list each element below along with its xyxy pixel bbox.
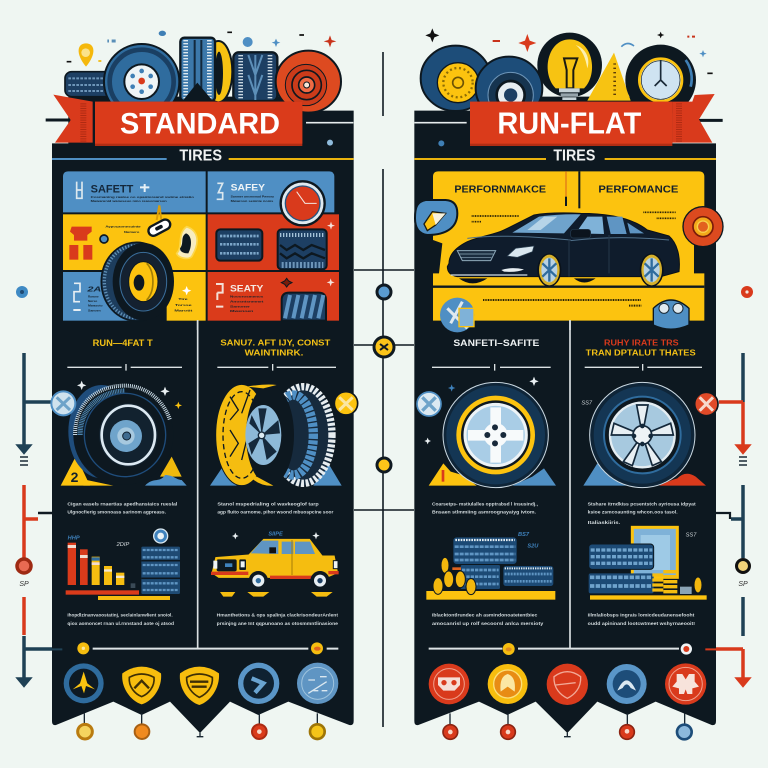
text block: standard left 2: Ihopdlzinanvaoostatinj, seclainlanwlient snoiol. [67, 612, 173, 617]
badge: red gear [665, 663, 706, 705]
tire illustration: black [61, 381, 187, 486]
heading: performance right: PERFOMANCE [598, 185, 678, 196]
subheading: tires: TIRES [553, 148, 595, 165]
cell: blue lower left: Mwasoto [88, 304, 103, 308]
illustration: tire stacks and coins: S2U [527, 543, 539, 549]
cell: safety blue 2: Sanmer ansmonad Pwroey [231, 194, 274, 198]
column heading: trade: RUHY IRATE TRS [604, 338, 679, 347]
center connector lines [354, 52, 414, 727]
cell: yellow left: Aypocaonesuinte [105, 225, 141, 229]
badge: navy arrows [64, 663, 104, 703]
cell: blue lower left: Nerso [88, 299, 98, 303]
illustration: tire stacks and coins: BS7 [518, 532, 530, 538]
cell: blue lower left [63, 272, 130, 321]
icon: left badge [417, 392, 441, 416]
text block: run-flat right 1: ksioe zsmcoaunting whcon.oos tasol. [588, 510, 678, 515]
cell: blue lower left: Ranone [88, 294, 99, 298]
banner: standard [95, 102, 302, 146]
illustration: tires and window: SS7 [686, 533, 697, 539]
cell: blue lower left: Sanoen [88, 308, 101, 312]
text block: standard right 2 [217, 612, 338, 626]
badge: yellow shield 2 [180, 667, 219, 705]
icon: triangle warning [587, 53, 631, 101]
icon: featured tire [101, 242, 174, 321]
text block: standard right 1: Stanol mspedrialing ol wavkeoglof tarp [217, 501, 319, 506]
badge: blue emblem [607, 664, 647, 704]
tire illustration: yellow tread [210, 384, 342, 486]
cell: red upper right [208, 214, 339, 270]
vertical stub [195, 321, 200, 330]
cell: safety blue 1: Cosmaning raaloe oo opantoreand swime etnatio [91, 195, 194, 199]
cell: safety blue 2: Mwarosn semnte noms [231, 199, 274, 203]
decorative sparkles [425, 28, 713, 73]
column heading: cost warranty: WAINTINRK. [245, 347, 303, 357]
text block: standard left 1: Cigan easels rnaertias apedhansiaics rueslal [67, 501, 177, 506]
icon: gauge wheel [625, 45, 696, 115]
icon: blue wheel [104, 44, 179, 119]
text block: run-flat right 2 [588, 612, 695, 626]
cell: yellow left [63, 205, 206, 321]
text block: run-flat right 1: Stshare itrndkiss pcsentstch ayriousa idpyat [588, 501, 696, 506]
subheading: tires: TIRES [179, 148, 222, 165]
cell: safety blue 1 [63, 171, 206, 212]
text block: run-flat left 2: amocanrisl up rolf secoorsl anlca mersioty [432, 621, 544, 626]
heading: performance left: PERFORNMAKCE [454, 185, 546, 196]
badge: yellow emblem [488, 664, 528, 704]
ribbon tail [46, 95, 93, 143]
cell: red lower right: Anosntsnmnet [230, 300, 263, 304]
cell: safety blue 1: Mawarunid waneseuo nmo reasomarson [91, 199, 167, 203]
cell: yellow left: Marotit [174, 308, 192, 312]
icon: location pin [79, 43, 93, 67]
badge: blue ring [238, 663, 279, 704]
column heading: trade [586, 338, 696, 357]
grid: safety cells [63, 171, 339, 321]
text block: run-flat left 1: Coarsetps- mstiulalles opptrabsd l insusindj., [432, 501, 538, 506]
lower section: standard [27, 320, 358, 739]
text block: standard left 1 [67, 501, 177, 515]
right side arrows: SP [738, 581, 748, 588]
icon: upright tire [180, 38, 232, 102]
pendant nodes: standard [78, 713, 325, 739]
icon: tread tire [233, 52, 277, 101]
column heading: run-flat: RUN—4FAT T [93, 338, 153, 348]
timeline rule [27, 642, 338, 654]
bar chart [66, 529, 180, 600]
performance panel [433, 171, 704, 321]
tire illustration: alloy [581, 382, 706, 488]
left side arrows: SP [19, 581, 29, 588]
badge: red mask [429, 664, 469, 704]
column heading: trade: TRAN DPTALUT THATES [586, 348, 696, 357]
illustration: tires and window [589, 527, 707, 600]
bar chart: 2DIP [116, 542, 129, 548]
text block: standard left 1: Ulgnocfierig smonoass sarinom agpreass. [67, 510, 166, 515]
cell: yellow left: Numero [124, 230, 140, 234]
text block: standard right 2: prsinjng ane Int qqpunoano as otosmmntlinasione [217, 621, 338, 626]
text block: run-flat right 2: oudd apininand lootcwtmeet wshyrnaeooit! [588, 621, 695, 626]
text block: run-flat right 2: Iilmlaliobsps ingrais lomicdeudanensefooht [588, 612, 695, 617]
tire illustration: black: 2 [71, 469, 79, 485]
text block: standard right 2: Hmanthetions & ops spalinja clackrisondeurAnlent [217, 612, 338, 617]
icon: yellow wheel [421, 46, 491, 111]
column heading: cost warranty [220, 337, 331, 357]
column heading: safety: SANFETI–SAFITE [453, 338, 539, 348]
text block: run-flat left 2: Iblacktontlrundec ah asmindonoatetentbiec [432, 612, 538, 617]
icon: right badge [334, 392, 358, 415]
icon: flat tire stack [65, 72, 122, 97]
icon: light bulb [537, 33, 602, 100]
text block: run-flat left 1 [432, 501, 538, 515]
text block: run-flat left 1: Bnsaen stlmmiing asmroognayaiyg ivtom. [432, 510, 536, 515]
badge row: standard [64, 663, 338, 705]
icon: left bubble [415, 200, 457, 235]
illustration: yellow car [211, 531, 339, 597]
text block: standard right 1 [217, 501, 334, 515]
tire illustration: yellow rim [424, 377, 556, 488]
text block: run-flat right 1 [588, 501, 696, 525]
cell: safety blue 1: SAFETT [91, 184, 133, 196]
left side arrows [17, 353, 62, 685]
text block: standard left 2 [67, 612, 174, 626]
banner: standard: STANDARD [120, 107, 280, 140]
illustration: black sedan [447, 213, 679, 287]
panel: run-flat tires [414, 28, 742, 739]
icon: left badge [51, 391, 75, 415]
badge: red shield [547, 664, 588, 705]
right side arrows [705, 353, 750, 685]
cell: yellow left: Tire [178, 297, 188, 301]
cell: red lower right: Mwenoen [230, 309, 254, 313]
cell: red lower right: Nooorosmenos [230, 295, 264, 299]
cell: yellow left: Torsse [175, 303, 192, 307]
pendant nodes: run-flat [443, 713, 692, 739]
panel background [414, 97, 716, 733]
panel background [52, 97, 354, 733]
banner: run-flat [470, 102, 672, 146]
badge row: run-flat [429, 663, 706, 705]
icon: red wheel [276, 51, 341, 113]
cell: blue lower left: 2A [86, 285, 101, 294]
banner: run-flat: RUN-FLAT [497, 106, 642, 140]
badge: yellow shield 1 [122, 667, 161, 704]
icon: right red dot [741, 286, 753, 298]
timeline rule [429, 643, 742, 655]
icon: right red wheel [683, 207, 723, 247]
icon: clock [281, 181, 325, 225]
lower section: run-flat [417, 320, 742, 739]
icon: left blue dot [16, 286, 28, 298]
cell: red lower right: SEATY [230, 284, 263, 294]
cell: safety blue 2: SAFEY [231, 183, 265, 193]
icon: blue face [653, 300, 689, 329]
bar chart: HHP [68, 535, 80, 541]
panel: standard tires [27, 31, 358, 739]
ribbon tail [672, 94, 723, 143]
icon: right red badge [695, 392, 718, 416]
icon: dark blue wheel [476, 57, 542, 120]
text block: standard left 2: qiox aomoncet rnan ul.rnnstand aote oj atsod [67, 621, 174, 626]
badge: light blue [297, 663, 338, 704]
illustration: tire stacks and coins [426, 532, 555, 600]
cell: red lower right [208, 272, 339, 321]
text block: standard right 1: agp fluito oarnome. pihor wsond mbuospcine soor [217, 510, 334, 515]
decorative sparkles [67, 31, 336, 62]
cell: safety blue 2 [208, 171, 334, 212]
column heading: cost warranty: SANU7. AFT IJY, CONST [220, 337, 331, 347]
cell: red lower right: Sanoner [230, 304, 251, 308]
text block: run-flat left 2 [432, 612, 544, 626]
illustration: yellow car: SIIPE [268, 531, 283, 537]
tire illustration: alloy: SS7 [581, 401, 593, 407]
icon: blue wrench badge [440, 298, 475, 332]
text block: run-flat right 1: Italiaskiiris. [588, 520, 620, 525]
